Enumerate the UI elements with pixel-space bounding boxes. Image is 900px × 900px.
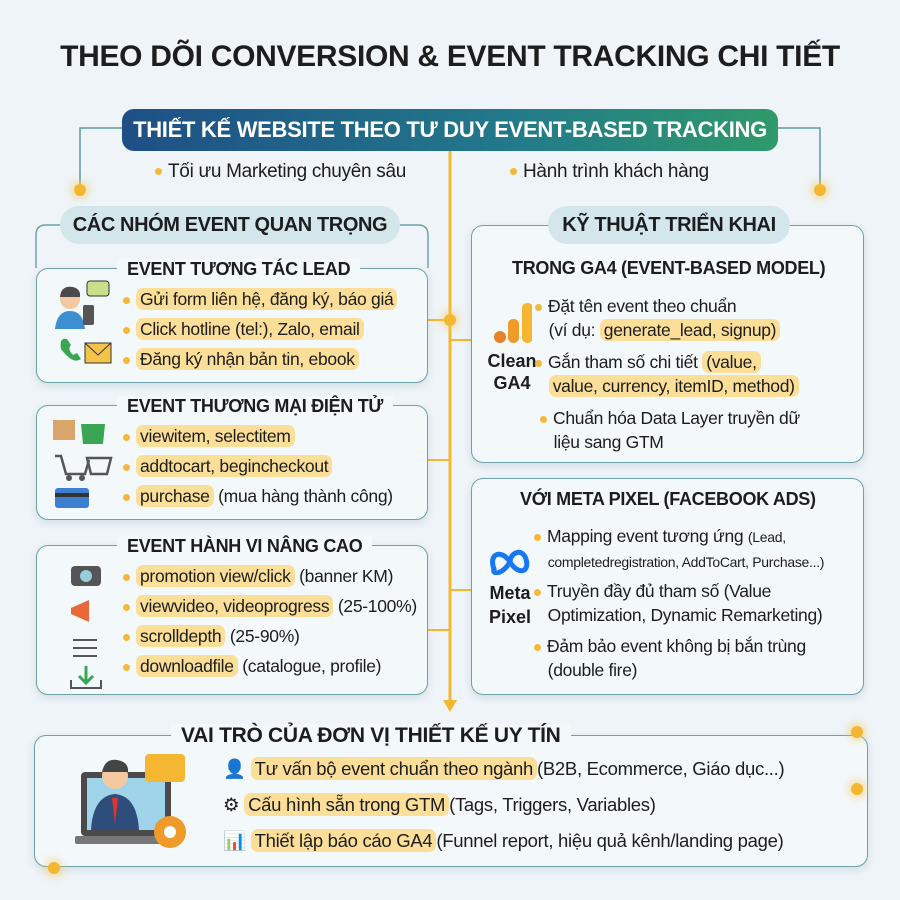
icon: GA4: GA4 [493, 373, 530, 393]
icon: consultant laptop [75, 754, 186, 848]
icon: GA4: Clean [487, 351, 537, 371]
panel: Meta Pixel: Truyền đầy đủ tham số (Value [547, 581, 771, 601]
banner: THIẾT KẾ WEBSITE THEO TƯ DUY EVENT-BASED TRACKING [133, 117, 767, 142]
panel title: VỚI META PIXEL (FACEBOOK ADS) [520, 489, 816, 509]
panel: Meta Pixel: Đảm bảo event không bị bắn trùng [547, 636, 806, 656]
right header pill: KỸ THUẬT TRIỂN KHAI [562, 214, 776, 236]
panel: GA4: value, currency, itemID, method) [553, 376, 795, 396]
items [535, 294, 780, 342]
panel: advanced behavior events: scrolldepth (25-90%) [140, 626, 299, 646]
panel: GA4: liệu sang GTM [554, 432, 664, 452]
panel: Meta Pixel [471, 478, 864, 695]
panel title: EVENT TƯƠNG TÁC LEAD [127, 259, 350, 279]
icon: boxes carts card [53, 420, 113, 508]
bullet: marketing: Tối ưu Marketing chuyên sâu [168, 161, 406, 182]
panel: advanced behavior events: downloadfile (catalogue, profile) [140, 656, 381, 676]
panel: role of agency [34, 735, 868, 867]
panel: lead events: Click hotline (tel:), Zalo, email [140, 319, 360, 339]
items [534, 524, 824, 574]
items: Đặt tên event theo chuẩn [548, 296, 736, 316]
panel: role of agency: ⚙ Cấu hình sẵn trong GTM(Tags, Triggers, Variables) [223, 794, 656, 815]
icon: meta: Meta [489, 583, 530, 603]
items: Gửi form liên hệ, đăng ký, báo giá [140, 289, 393, 309]
panel: ecommerce events [36, 405, 428, 520]
panel: GA4: Chuẩn hóa Data Layer truyền dữ [553, 408, 800, 428]
panel title: EVENT HÀNH VI NÂNG CAO [127, 536, 362, 556]
right header pill [548, 206, 790, 244]
icon: person phone [55, 280, 112, 364]
panel: ecommerce events: addtocart, begincheckout [140, 456, 328, 476]
title: THEO DÕI CONVERSION & EVENT TRACKING CHI TIẾT [60, 40, 840, 73]
panel: GA4 [471, 225, 864, 463]
left header pill: CÁC NHÓM EVENT QUAN TRỌNG [73, 214, 387, 236]
icon: GA4 [487, 303, 537, 393]
items: (ví dụ: generate_lead, signup) [549, 320, 776, 340]
items: 👤 Tư vấn bộ event chuẩn theo ngành(B2B, Ecommerce, Giáo dục...) [223, 758, 784, 779]
left header pill [60, 206, 400, 244]
glow dots [74, 184, 86, 196]
icon: meta: Pixel [489, 607, 531, 627]
items: promotion view/click (banner KM) [140, 566, 393, 586]
panel title: VAI TRÒ CỦA ĐƠN VỊ THIẾT KẾ UY TÍN [181, 724, 561, 747]
items: completedregistration, AddToCart, Purchase...) [548, 554, 824, 570]
panel: Meta Pixel: Optimization, Dynamic Remarketing) [548, 605, 822, 625]
items: Mapping event tương ứng (Lead, [547, 526, 786, 546]
panel: advanced behavior events [36, 545, 428, 695]
panel: ecommerce events: purchase (mua hàng thành công) [140, 486, 393, 506]
panel title: TRONG GA4 (EVENT-BASED MODEL) [512, 258, 825, 278]
panel: lead events [36, 268, 428, 383]
items: viewitem, selectitem [140, 426, 291, 446]
panel: lead events: Đăng ký nhận bản tin, ebook [140, 349, 355, 369]
icon: meta [489, 550, 531, 627]
panel: advanced behavior events: viewvideo, videoprogress (25-100%) [140, 596, 417, 616]
panel: GA4: Gắn tham số chi tiết (value, [548, 352, 757, 372]
panel: role of agency: 📊 Thiết lập báo cáo GA4(Funnel report, hiệu quả kênh/landing page) [223, 830, 783, 851]
banner [122, 109, 778, 151]
icon: camera megaphone scroll download [70, 566, 102, 689]
panel: Meta Pixel: (double fire) [548, 660, 637, 680]
bullet: journey: Hành trình khách hàng [523, 161, 709, 182]
panel title: EVENT THƯƠNG MẠI ĐIỆN TỬ [127, 396, 383, 416]
